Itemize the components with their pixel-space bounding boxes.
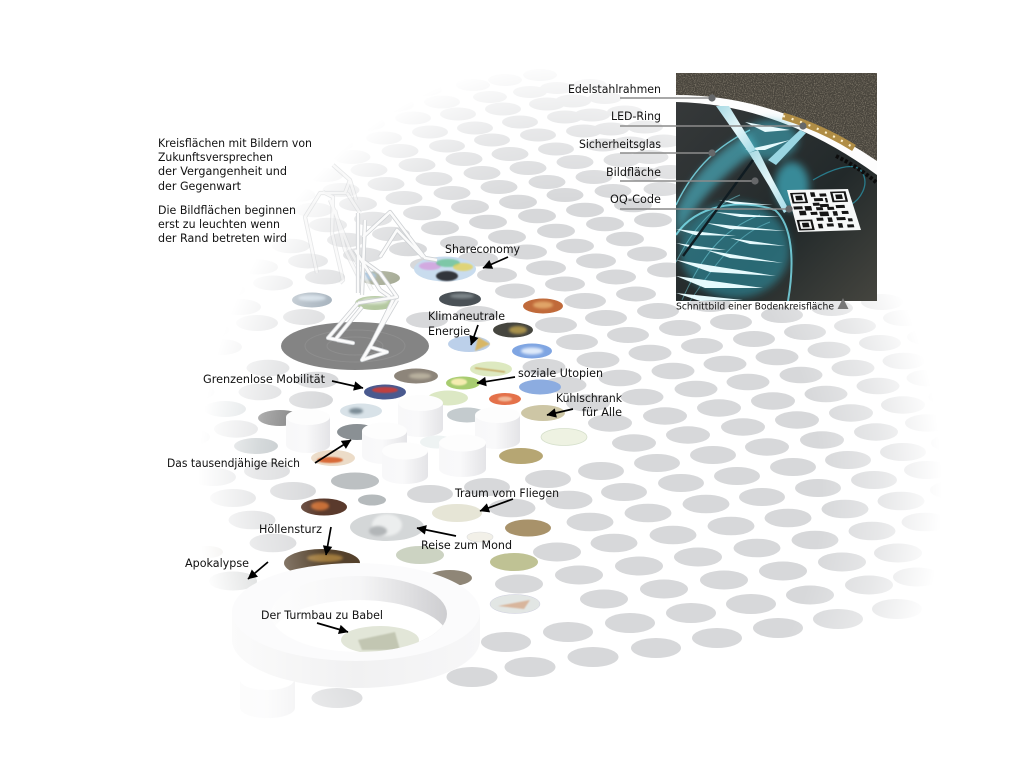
callout labels: Das tausendjähige Reich xyxy=(167,457,300,470)
disc: soziale Utopien xyxy=(446,376,480,390)
disc: brown map xyxy=(499,448,543,464)
inset leader lines xyxy=(620,94,807,213)
dark strand xyxy=(683,160,753,256)
image discs along the path xyxy=(193,256,587,614)
right band xyxy=(768,130,806,165)
disc: engraving xyxy=(331,472,379,490)
disc: fire xyxy=(301,498,347,516)
helix swirl lines xyxy=(676,130,865,301)
disc: centre white xyxy=(420,436,446,448)
cylinder 3 xyxy=(475,407,520,449)
disc: Traum vom Fliegen xyxy=(432,504,482,522)
disc: behind ring xyxy=(428,570,472,586)
intro text: Kreisflächen mit Bildern von xyxy=(158,137,312,150)
triangle marker xyxy=(838,298,848,309)
disc: orange lower xyxy=(489,393,521,405)
dark circle under figure xyxy=(281,322,429,370)
helix glow xyxy=(676,120,809,298)
disc: under figure xyxy=(355,296,390,310)
ring structure xyxy=(232,563,480,688)
frame teeth xyxy=(836,156,877,183)
glass and image surface xyxy=(676,102,877,301)
cylinders xyxy=(240,395,520,718)
QR code xyxy=(787,189,861,232)
intro text: Zukunftsversprechen xyxy=(158,151,273,164)
walking figure, back pose xyxy=(305,165,372,290)
callout labels: Kühlschrank xyxy=(556,392,622,405)
ring side xyxy=(232,612,480,688)
callout labels: soziale Utopien xyxy=(518,367,603,380)
inset labels: Sicherheitsglas xyxy=(579,138,661,151)
ring top xyxy=(232,563,480,661)
disc: yellow green xyxy=(490,553,538,571)
callout labels: Reise zum Mond xyxy=(421,539,512,552)
cylinder 7 xyxy=(240,670,295,718)
callout labels: Höllensturz xyxy=(259,523,322,536)
inset labels xyxy=(568,83,661,206)
floor circle grid xyxy=(216,83,921,708)
disc: tiny white xyxy=(467,532,493,542)
section image inset xyxy=(676,73,877,301)
disc: top left xyxy=(360,271,400,285)
lower ribbon xyxy=(749,150,789,213)
intro text: der Gegenwart xyxy=(158,180,242,193)
cylinder 5 xyxy=(439,434,486,477)
intro text: der Rand betreten wird xyxy=(158,232,287,245)
grey circle pattern xyxy=(219,83,921,708)
disc: brown xyxy=(505,520,551,536)
callout labels: Grenzenlose Mobilität xyxy=(203,373,326,386)
disc: pale yellow map xyxy=(470,362,512,376)
disc: pale left xyxy=(219,401,246,417)
asphalt surface xyxy=(676,73,877,301)
inset labels: Bildfläche xyxy=(606,166,661,179)
disc: left landscape xyxy=(292,292,332,308)
intro text: Die Bildflächen beginnen xyxy=(158,204,296,217)
inset labels: OQ-Code xyxy=(610,193,661,206)
disc: Kuehlschrank fuer Alle xyxy=(521,405,565,421)
stainless frame xyxy=(676,95,877,176)
disc: map xyxy=(490,594,540,614)
callout labels: Shareconomy xyxy=(445,243,520,256)
cylinder 2 xyxy=(398,395,443,437)
cylinder 4 xyxy=(362,422,407,464)
disc: grey brown xyxy=(394,368,438,384)
disc: Shareconomy xyxy=(414,256,476,282)
callout arrows xyxy=(248,257,573,632)
LED strip xyxy=(783,116,854,148)
disc: white blue xyxy=(340,404,382,418)
disc: dark gold xyxy=(493,322,533,338)
intro text xyxy=(158,137,312,245)
callout labels: für Alle xyxy=(582,406,622,419)
callout labels: Traum vom Fliegen xyxy=(454,487,559,500)
disc: Reise zum Mond xyxy=(350,513,424,541)
DNA rungs xyxy=(676,122,790,301)
disc: centre xyxy=(447,408,481,422)
callout labels: Apokalypse xyxy=(185,557,249,570)
disc: blue lower xyxy=(519,380,561,394)
disc: orange xyxy=(523,298,563,314)
disc: green sketch xyxy=(396,546,444,564)
callout labels: Energie xyxy=(428,325,470,338)
disc: small grey xyxy=(358,494,386,506)
walking figure, front pose xyxy=(328,212,437,360)
inset labels: Edelstahlrahmen xyxy=(568,83,661,96)
light ribbon xyxy=(716,106,756,153)
disc: dark city xyxy=(439,292,481,306)
disc: pale green xyxy=(428,390,468,406)
disc: grey left xyxy=(234,438,278,454)
intro text: erst zu leuchten wenn xyxy=(158,218,280,231)
disc: faint far left xyxy=(193,546,223,558)
inset labels: LED-Ring xyxy=(611,110,661,123)
callout labels: Klimaneutrale xyxy=(428,310,505,323)
intro text: der Vergangenheit und xyxy=(158,165,287,178)
disc: Klimaneutrale Energie xyxy=(448,336,490,352)
disc: Apokalypse xyxy=(209,572,257,590)
disc: Grenzenlose Mobilitaet xyxy=(364,384,406,400)
callout labels xyxy=(167,243,622,622)
disc: grey xyxy=(337,424,368,440)
disc: blue xyxy=(512,344,552,358)
ring hole with disc Der Turmbau zu Babel xyxy=(269,575,449,680)
disc: red yellow xyxy=(311,450,355,466)
disc: pale green right xyxy=(541,428,587,446)
inset caption: Schnittbild einer Bodenkreisfläche xyxy=(676,302,834,312)
cylinder 1 xyxy=(286,409,330,453)
disc: dark xyxy=(258,410,292,426)
callout labels: Der Turmbau zu Babel xyxy=(261,609,383,622)
cylinder 6 xyxy=(382,442,428,484)
disc: Hoellensturz xyxy=(284,549,360,570)
